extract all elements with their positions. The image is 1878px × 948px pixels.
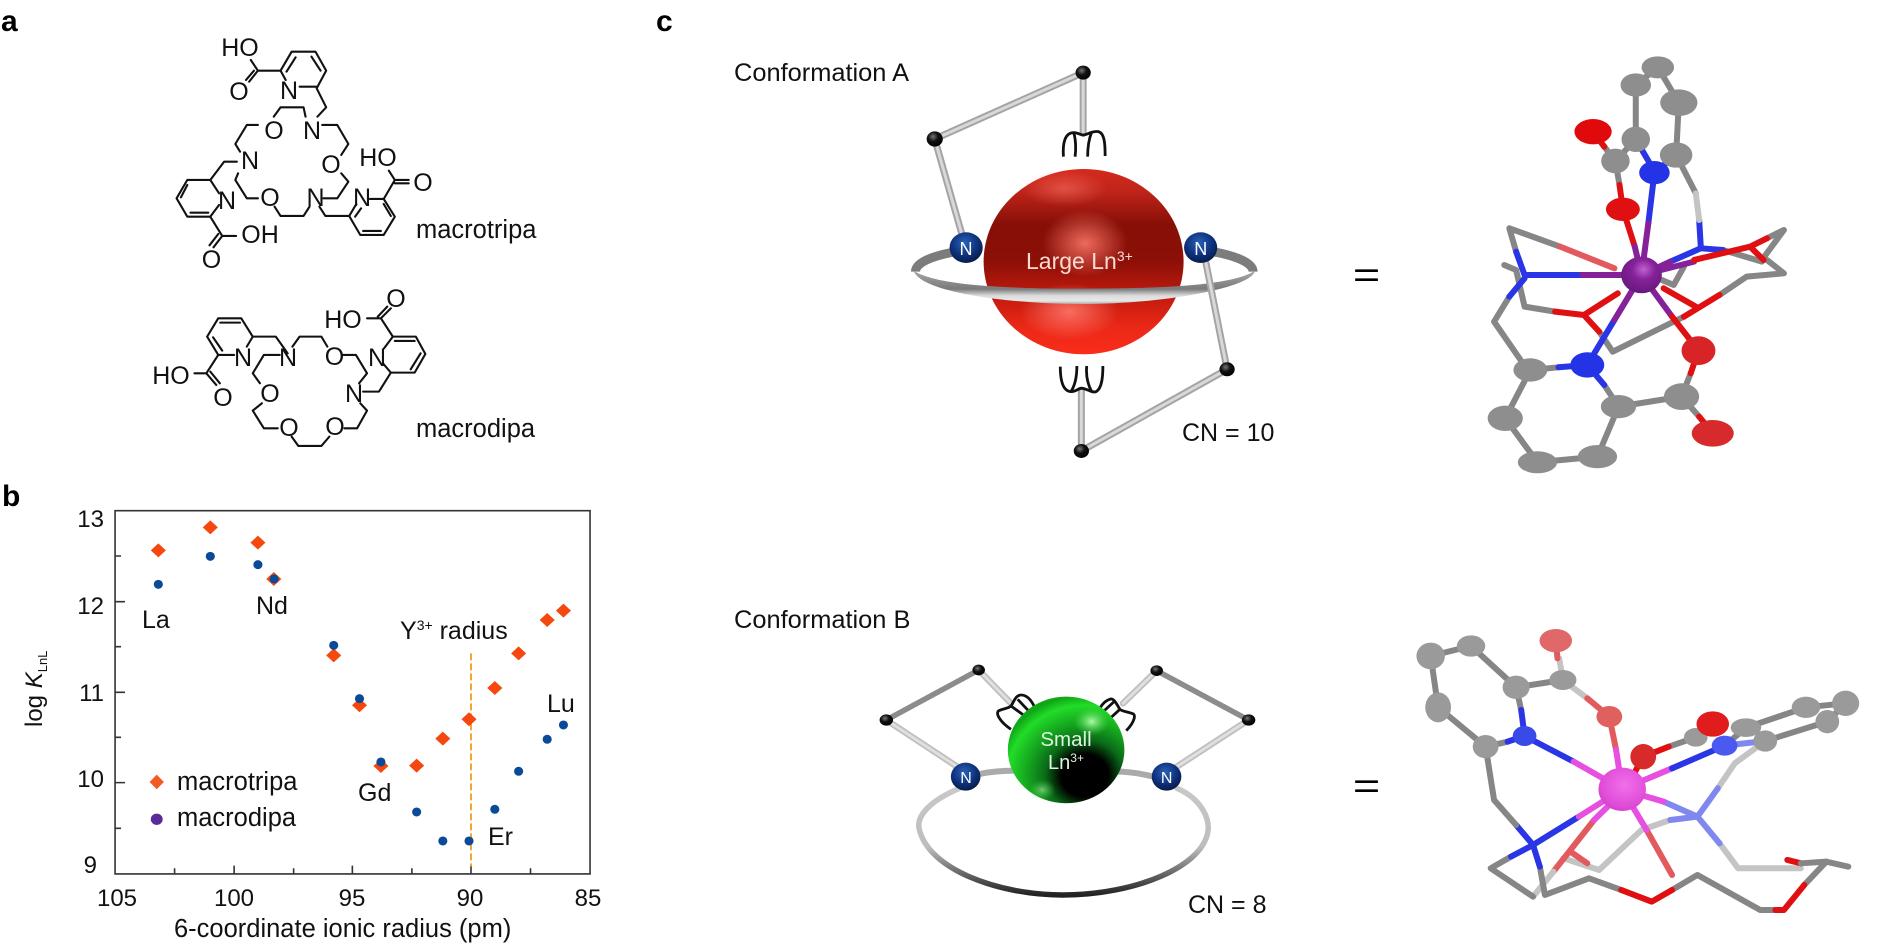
schematic: conformation B [880,665,1255,895]
claws [998,695,1035,729]
ring [919,788,1208,895]
red sphere [984,169,1184,354]
lower rods [1081,263,1227,451]
y axis tick labels [77,506,104,879]
structure: macrodipa: HO [324,306,362,334]
series: macrotripa diamonds [151,520,571,773]
legend markers [150,775,164,825]
equals sign A: = [1353,254,1380,295]
structure: macrodipa [152,285,425,446]
rods [886,670,1249,767]
structure: macrodipa: HO [152,362,190,390]
sphere label: Small Ln3+: Ln [1048,752,1070,774]
nitrogen labels [960,239,1207,259]
structure: macrotripa: O [321,151,341,179]
structure: macrotripa: N [353,184,371,212]
joints [972,665,985,675]
label: macrodipa: macrodipa [416,415,536,443]
annotation: Y3+ radius: radius [433,617,508,645]
sphere label: Large Ln3+: Large Ln [1026,248,1117,274]
annotation: Y3+ radius: Y [400,617,417,645]
y axis tick labels: 13 [77,506,104,533]
claws [1063,132,1105,157]
nitrogen labels [960,770,1172,787]
y axis tick labels: 11 [79,680,104,707]
green sphere [1008,697,1124,803]
label: CN = 8: CN = 8 [1188,891,1267,919]
atoms [1416,629,1859,811]
heading: Conformation A: Conformation A [734,59,909,87]
ring back [915,249,1253,272]
element label: Er: Er [488,823,513,851]
structure: macrodipa: N [368,344,386,372]
x axis tick labels: 90 [457,885,483,912]
element label: La: La [142,606,170,634]
structure: macrodipa: O [325,413,345,441]
structure: macrotripa: O [260,184,280,212]
x axis tick labels: 85 [575,885,601,912]
ring front [914,271,1255,304]
structure: macrotripa: HO [221,34,259,62]
y axis tick labels: 9 [84,852,97,879]
structure: macrodipa: N [234,344,252,372]
structure: macrotripa: O [202,246,221,274]
sphere label: Small Ln3+: 3+ [1070,751,1084,765]
x axis tick labels [97,885,601,912]
structure: macrotripa: N [303,117,321,145]
nitrogen labels: N [960,770,972,787]
structure: macrodipa: N [279,344,297,372]
y axis tick labels: 10 [77,766,104,793]
structure: macrotripa: O [413,169,433,197]
equals sign B: = [1353,765,1380,806]
crystal structure B [1416,629,1859,910]
structure: macrotripa: N [218,187,236,215]
structure: macrotripa: O [264,117,284,145]
annotation: Y3+ radius: 3+ [417,617,433,633]
y axis title: LnL [35,651,50,672]
panel c label: c [656,5,673,38]
structure: macrotripa: OH [241,221,279,249]
structure: macrotripa: N [280,77,298,105]
nitrogen labels: N [1194,239,1207,259]
plot frame, ticks and data points [115,511,590,874]
element label: Lu: Lu [547,690,575,718]
heading: Conformation B: Conformation B [734,606,910,634]
x axis title: 6-coordinate ionic radius (pm) [174,915,511,943]
structure: macrodipa: N [345,380,363,408]
sphere label: Small Ln3+ [1040,728,1092,774]
structure: macrodipa: O [386,285,406,313]
structure: macrodipa: O [260,380,280,408]
structure: macrotripa: O [229,78,249,106]
nitrogen spheres [950,232,983,263]
legend label: macrotripa: macrotripa [177,768,298,796]
schematic: conformation A [914,66,1255,458]
x axis tick labels: 95 [339,885,365,912]
panel b label: b [2,480,20,513]
rods [935,73,1083,233]
label: CN = 10: CN = 10 [1182,419,1274,447]
structure: macrodipa: O [213,384,233,412]
panel a: chemical structures [152,34,537,446]
structure: macrotripa [177,34,433,274]
nitrogen labels: N [1161,770,1172,787]
label: macrotripa: macrotripa [416,216,537,244]
nitrogen labels: N [960,239,972,259]
element label: Nd: Nd [256,592,288,620]
legend label: macrodipa: macrodipa [177,804,297,832]
x axis tick labels: 105 [97,885,137,912]
nitrogen spheres [951,763,980,791]
structure: macrodipa: O [279,414,299,442]
series: macrodipa circles [154,552,568,845]
crystal structure A [1488,56,1784,473]
panel b: scatter chart [21,506,601,943]
black joints [1076,66,1091,80]
x axis tick labels: 100 [214,885,254,912]
panel a label: a [1,5,18,38]
atoms [1488,56,1734,473]
sphere label: Small Ln3+: Small [1040,728,1092,751]
y axis title: log K [21,672,48,727]
element label: Gd: Gd [358,779,391,807]
structure: macrotripa: HO [359,144,397,172]
y axis tick labels: 12 [77,593,104,620]
sphere label: Large Ln3+: 3+ [1117,248,1133,264]
structure: macrodipa: O [325,343,344,371]
structure: macrotripa: N [241,147,259,175]
structure: macrotripa: N [306,184,325,212]
